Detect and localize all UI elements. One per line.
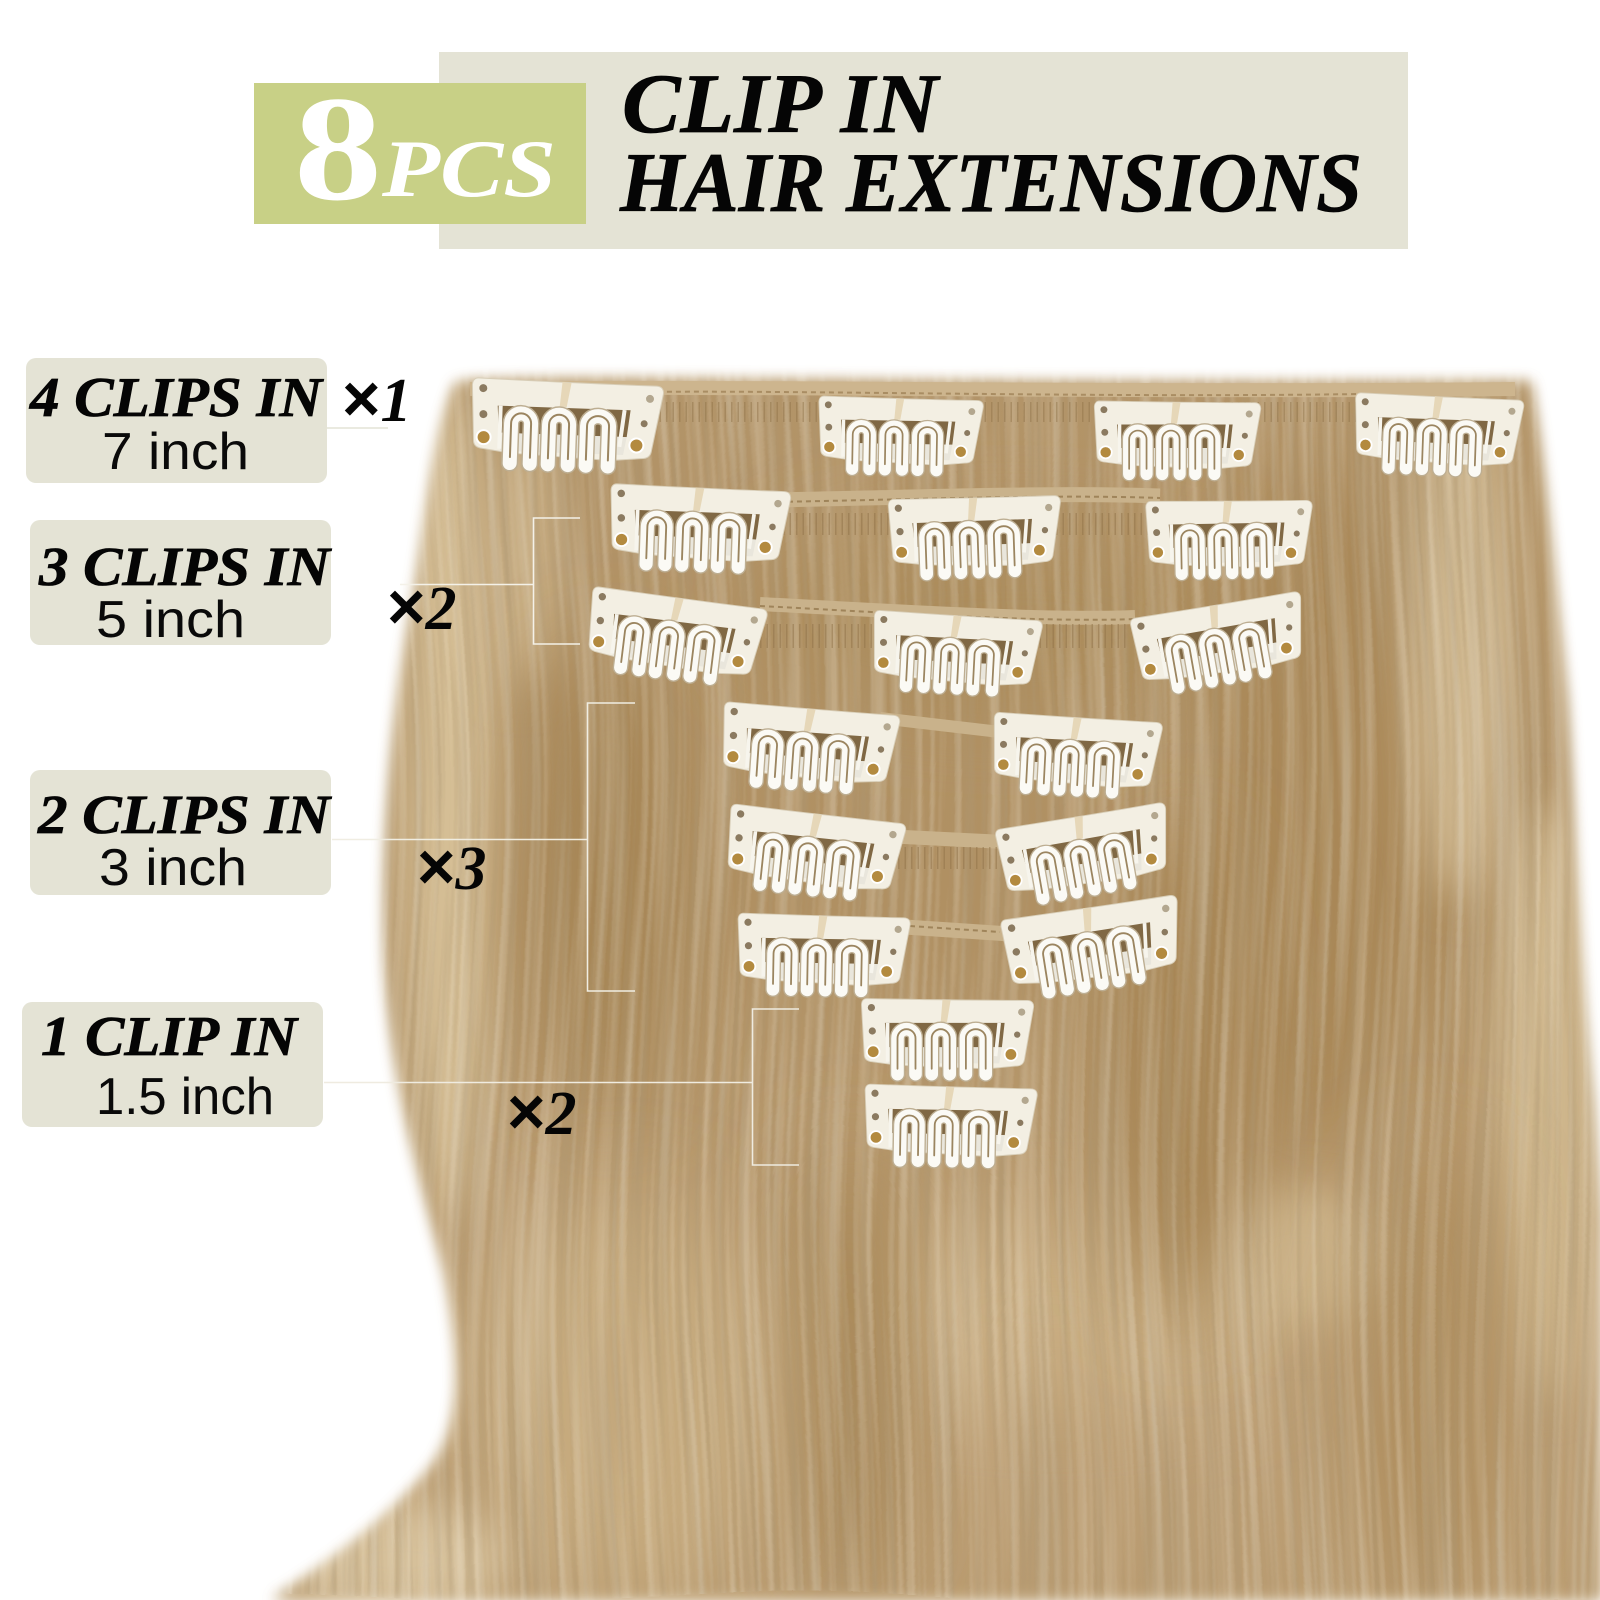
- label: 3 clips 5 inch: [30, 520, 332, 649]
- title: HAIR EXTENSIONS: [619, 136, 1362, 230]
- label: 3 clips 5 inch: 5 inch: [96, 591, 245, 649]
- label: 1 clip 1.5 inch: 1 CLIP IN: [41, 1006, 300, 1068]
- label: 2 clips 3 inch: [30, 770, 332, 897]
- clips: row of four (7 inch weft): [470, 378, 1524, 474]
- label: 1 clip 1.5 inch: 1.5 inch: [96, 1068, 274, 1126]
- bracket: 2 clips: [332, 703, 635, 991]
- photo: blonde hair extensions: [250, 360, 1600, 1600]
- badge: 8 pcs: 8: [294, 66, 382, 232]
- label: 2 clips 3 inch: 2 CLIPS IN: [37, 784, 332, 845]
- header panel: [439, 52, 1408, 249]
- bracket: 3 clips: [400, 518, 580, 644]
- title: [619, 57, 1362, 230]
- leader: 4 clips: [327, 427, 388, 429]
- label: 4 clips 7 inch: [26, 358, 327, 483]
- weft strips holding the hair: [470, 388, 1515, 934]
- label: 4 clips 7 inch: 7 inch: [102, 423, 249, 481]
- title: CLIP IN: [622, 57, 941, 151]
- multiplier x3: ×3: [417, 829, 487, 903]
- label: 1 clip 1.5 inch: [22, 1002, 323, 1127]
- clips: three rows of two (3 inch wefts): [719, 702, 1188, 998]
- label: 4 clips 7 inch: 4 CLIPS IN: [29, 367, 325, 429]
- multiplier x1: ×1: [342, 361, 412, 435]
- label: 2 clips 3 inch: 3 inch: [99, 839, 247, 897]
- clips: two rows of three (5 inch wefts): [584, 484, 1313, 694]
- clips: two single clips (1.5 inch wefts): [862, 999, 1037, 1163]
- multiplier x2: ×2: [507, 1074, 577, 1148]
- badge: 8 pcs: [254, 66, 586, 232]
- bracket: 1 clip: [324, 1009, 799, 1165]
- multiplier x2: ×2: [387, 569, 457, 643]
- label: 3 clips 5 inch: 3 CLIPS IN: [38, 536, 332, 597]
- badge: 8 pcs: PCS: [381, 123, 556, 214]
